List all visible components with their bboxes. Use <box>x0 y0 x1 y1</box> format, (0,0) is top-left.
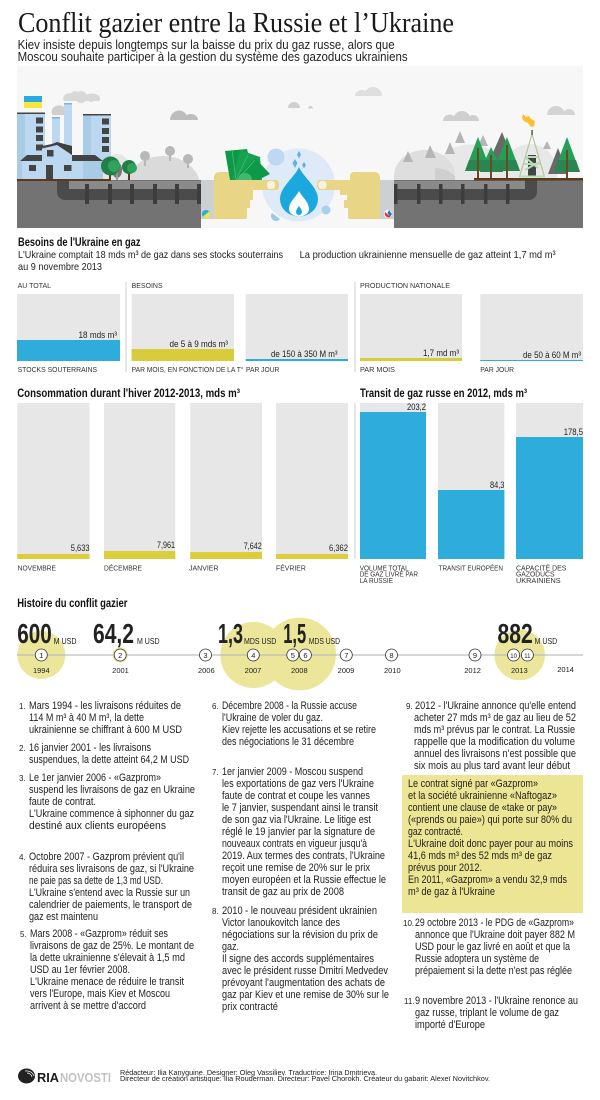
callout: take or pay: En 2011, «Gazprom» a vendu 32,9 mds <box>408 874 567 886</box>
panel: au total: 18 mds m³ <box>78 330 117 340</box>
bar: transit européen: TRANSIT EUROPÉEN <box>439 564 503 572</box>
event 8: prix contracté <box>222 1001 278 1013</box>
central valves <box>201 180 394 219</box>
event 8: Il signe des accords supplémentaires <box>222 953 375 965</box>
event numbers: 10 <box>510 654 518 660</box>
bar: février: 6,362 <box>329 543 348 553</box>
bar: volume total: VOLUME TOTAL <box>360 564 409 572</box>
event 5: Mars 2008 - «Gazprom» réduit ses <box>30 928 168 940</box>
intro paragraph: production: La production ukrainienne mensuelle de gaz atteint 1,7 md m³ <box>300 249 556 261</box>
callout: take or pay: contient une clause de «take or pay» <box>408 802 557 814</box>
bar: février: FÉVRIER <box>276 564 306 572</box>
event 9: annuel des livraisons n'est possible que <box>414 748 576 760</box>
debt amounts <box>17 618 533 649</box>
bar: novembre: 5,633 <box>71 543 90 553</box>
event 7: nouveaux contrats en vigueur jusqu'à <box>222 838 367 850</box>
years: 2006 <box>198 666 215 675</box>
subtitle: Moscou souhaite participer à la gestion du système des gazoducs ukrainiens <box>18 49 408 64</box>
bar: volume total: LA RUSSIE <box>360 576 393 585</box>
divider lines <box>126 282 356 559</box>
event 4: 4. <box>19 853 26 862</box>
event numbers: 3 <box>203 651 208 660</box>
bar: novembre: NOVEMBRE <box>18 564 56 572</box>
panel: au total: AU TOTAL <box>18 281 51 290</box>
event 2: suspendues, la dette atteint 64,2 M USD <box>29 754 189 766</box>
credits: Rédacteur: Ilia Kanyguine. Designer: Oleg Vassiliev. Traductrice: Irina Dmitrieva. <box>120 1070 377 1077</box>
event 3: 3. <box>19 774 26 783</box>
panel: production par mois <box>360 281 462 374</box>
event 8: négociations sur la révision du prix de <box>222 929 378 941</box>
event 7: transit de gaz au prix de 2008 <box>222 886 344 898</box>
event 7 <box>212 766 386 898</box>
bar: capacité <box>516 403 583 585</box>
debt circles <box>17 618 545 690</box>
event 7: moyen européen et la Russie effectue le <box>222 874 386 886</box>
panel: production par jour: de 50 à 60 M m³ <box>523 350 581 360</box>
event 8: gaz. <box>222 941 239 953</box>
years: 2010 <box>384 666 401 675</box>
event 4: gaz est maintenu <box>29 911 98 923</box>
event 7: les exportations de gaz vers l'Ukraine <box>222 778 374 790</box>
event 5: 5. <box>20 930 27 939</box>
event 8 <box>212 905 389 1013</box>
event 7: réglé le 19 janvier par la signature de <box>222 826 375 838</box>
event 1: ukrainienne se chiffrant à 600 M USD <box>29 724 182 736</box>
bar: capacité: 178,5 <box>564 427 583 437</box>
left hills <box>100 154 134 206</box>
intro paragraph: stocks: au 9 novembre 2013 <box>18 261 102 273</box>
debt units: M USD <box>535 637 557 646</box>
icon: Ukraine badge <box>202 210 210 218</box>
event 8: gaz par Kiev et une remise de 30% sur le <box>222 989 389 1001</box>
event 4: calendrier de paiements, le transport de <box>29 899 192 911</box>
bar: volume total <box>360 402 426 585</box>
event 7: 7. <box>212 768 219 777</box>
panel: production par jour: PAR JOUR <box>480 365 515 374</box>
green trees <box>101 156 137 180</box>
event numbers <box>39 651 531 660</box>
bar: novembre <box>17 403 90 572</box>
debt amounts: 1,3 <box>218 618 243 649</box>
bar: janvier: 7,642 <box>244 541 262 551</box>
right hills <box>435 144 505 180</box>
clouds <box>63 87 575 121</box>
left gray trees <box>140 146 193 168</box>
event 5: la dette ukrainienne s'élevait à 1,5 md <box>30 952 185 964</box>
event 9: 9. <box>406 702 413 711</box>
debt amounts: 882 <box>498 618 533 649</box>
intro paragraph: stocks: L'Ukraine comptait 18 mds m³ de gaz dans ses stocks souterrains <box>18 249 283 261</box>
subtitle <box>18 37 408 64</box>
event 6: 6. <box>212 702 219 711</box>
event numbers: 1 <box>39 651 43 660</box>
event 8: 8. <box>212 907 219 916</box>
bar: capacité: CAPACITÉ DES <box>516 564 566 572</box>
event 9: 2012 - l'Ukraine annonce qu'elle entend <box>415 700 576 712</box>
bar: capacité: UKRAINIENS <box>516 576 561 585</box>
heading: needs: Besoins de l'Ukraine en gaz <box>18 235 140 249</box>
event numbers: 4 <box>251 651 255 660</box>
event 4: L'Ukraine s'entend avec la Russie sur un <box>29 887 190 899</box>
years <box>33 665 574 675</box>
event 2: 16 janvier 2001 - les livraisons <box>29 742 152 754</box>
panel: besoins par jour: PAR JOUR <box>246 365 280 374</box>
subtitle: Kiev insiste depuis longtemps sur la baisse du prix du gaz russe, alors que <box>18 37 395 52</box>
right gray trees <box>403 131 551 162</box>
callout: take or pay: Le contrat signé par «Gazprom» <box>408 778 538 790</box>
event 5: L'Ukraine menace de réduire le transit <box>30 976 184 988</box>
event 5: vers l'Europe, mais Kiev et Moscou <box>30 988 170 1000</box>
years: 2008 <box>291 666 308 675</box>
event 6: l'Ukraine de voler du gaz. <box>222 712 323 724</box>
years: 2012 <box>464 666 481 675</box>
event 4: Octobre 2007 - Gazprom prévient qu'il <box>29 851 184 863</box>
illustration: gas conflict scene <box>17 66 583 228</box>
bar: volume total: DE GAZ LIVRÉ PAR <box>360 570 418 579</box>
bar: volume total: 203,2 <box>407 402 426 412</box>
event 7: reçoit une remise de 20% sur le prix <box>222 862 371 874</box>
event 8: avec le président russe Dmitri Medvedev <box>222 965 389 977</box>
bar: décembre: DÉCEMBRE <box>104 564 142 572</box>
credits <box>120 1070 490 1083</box>
event 3 <box>19 772 195 832</box>
event 7: 1er janvier 2009 - Moscou suspend <box>222 766 363 778</box>
bar chart: gas transit <box>360 402 583 585</box>
event 10: 10. <box>403 919 414 928</box>
panel: production par jour <box>480 294 583 374</box>
event 5: livraisons de gaz de 25%. Le montant de <box>30 940 194 952</box>
event 11: gaz russe, triplant le volume de gaz <box>415 1007 559 1019</box>
panel: besoins par mois: de 5 à 9 mds m³ <box>170 339 228 349</box>
event 5: arrivent à se mettre d'accord <box>30 1000 146 1012</box>
heading: transit: Transit de gaz russe en 2012, mds m³ <box>360 386 527 400</box>
event 6: des négociations le 31 décembre <box>222 736 354 748</box>
debt amounts: 1,5 <box>283 618 306 649</box>
event 6 <box>212 700 376 748</box>
debt amounts: 600 <box>17 618 52 649</box>
event 11: 11. <box>404 997 415 1006</box>
event 5 <box>20 928 194 1012</box>
event 11 <box>404 995 578 1031</box>
event 3: destiné aux clients européens <box>29 820 167 832</box>
green pine trees <box>465 137 580 178</box>
years: 2013 <box>511 666 528 675</box>
event 9: mds m³ prévus par le contrat. La Russie <box>414 724 575 736</box>
logo: RIA Novosti: RIA <box>37 1070 60 1085</box>
event 10: annonce que l'Ukraine doit payer 882 M <box>415 929 575 941</box>
icon: Russia badge <box>384 210 392 218</box>
event 6: Kiev rejette les accusations et se retire <box>222 724 376 736</box>
event 7: faute de contrat et coupe les vannes <box>222 790 371 802</box>
panel: au total <box>17 281 120 374</box>
panel: production par mois: 1,7 md m³ <box>423 348 459 358</box>
event 10: USD pour le gaz livré en août et que la <box>415 941 570 953</box>
event 5: USD au 1er février 2008. <box>30 964 130 976</box>
event 7: le 7 janvier, suspendant ainsi le transit <box>222 802 378 814</box>
event 11: importé d'Europe <box>415 1019 485 1031</box>
event 3: faute de contrat. <box>29 796 96 808</box>
event 4: réduira ses livraisons de gaz, si l'Ukraine <box>29 863 194 875</box>
logo: RIA Novosti: NOVOSTI <box>60 1070 111 1085</box>
callout: take or pay: et la société ukrainienne «Naftogaz» <box>408 790 557 802</box>
heading: consumption: Consommation durant l'hiver 2012-2013, mds m³ <box>17 386 240 400</box>
event 10 <box>403 917 575 977</box>
event 4 <box>19 851 194 923</box>
heading: history: Histoire du conflit gazier <box>17 596 128 610</box>
bar: février <box>276 403 348 572</box>
event 7: de son gaz via l'Ukraine. Le litige est <box>222 814 371 826</box>
panel: besoins par mois <box>132 281 244 374</box>
event 7: 2019. Aux termes des contrats, l'Ukraine <box>222 850 385 862</box>
event 9: acheter 27 mds m³ de gaz au lieu de 52 <box>414 712 576 724</box>
event 3: Le 1er janvier 2006 - «Gazprom» <box>29 772 161 784</box>
event numbers: 6 <box>303 651 307 660</box>
event 3: L'Ukraine commence à siphonner du gaz <box>29 808 194 820</box>
years: 2009 <box>338 666 354 675</box>
callout: take or pay: («prends ou paie») qui porte sur 80% du <box>408 814 572 826</box>
event numbers: 8 <box>389 651 394 660</box>
event 2 <box>19 742 189 766</box>
debt units <box>54 637 557 646</box>
panel: au total: STOCKS SOUTERRAINS <box>18 365 97 374</box>
callout: take or pay: gaz contracté. <box>408 826 463 838</box>
event 10: prépaiement si la dette n'est pas réglée <box>415 965 572 977</box>
panel: besoins par jour: de 150 à 350 M m³ <box>271 349 338 359</box>
left hand <box>214 172 279 219</box>
title: Conflit gazier entre la Russie et l’Ukraine <box>18 7 454 39</box>
left ground and pipe <box>17 179 201 228</box>
event numbers: 2 <box>118 651 122 660</box>
bar: capacité: GAZODUCS <box>516 570 554 579</box>
callout: take or pay: L'Ukraine doit donc payer pour au moins <box>408 838 574 850</box>
event numbers: 9 <box>473 651 477 660</box>
event numbers: 11 <box>524 654 531 660</box>
panel: besoins par jour <box>246 294 348 374</box>
years: 2014 <box>557 665 574 674</box>
event 9: six mois au plus tard avant leur début <box>414 760 570 772</box>
bar: décembre <box>104 403 175 572</box>
gas bubble and drop <box>262 148 335 222</box>
callout: take or pay: prévus pour 2012. <box>408 862 482 874</box>
debt units: MDS USD <box>309 637 340 646</box>
right ground and pipe <box>394 178 583 228</box>
bar: transit européen: 84,3 <box>490 480 504 490</box>
debt units: MDS USD <box>244 637 276 646</box>
event 8: prévoyant l'augmentation des achats de <box>222 977 385 989</box>
callout: take or pay: m³ de gaz à l'Ukraine <box>408 886 495 898</box>
event 1: Mars 1994 - les livraisons réduites de <box>29 700 181 712</box>
credits: Directeur de création artistique: Ilia Rouderman. Directeur: Pavel Chorokh. Créateur du gabarit: Alexeï Novitchkov. <box>120 1076 490 1083</box>
gas rig with flame <box>520 114 545 177</box>
years: 2001 <box>112 666 129 675</box>
event 2: 2. <box>19 744 26 753</box>
event 8: Victor Ianoukovitch lance des <box>222 917 341 929</box>
factory and city buildings <box>17 103 111 180</box>
callout: take or pay <box>402 775 583 913</box>
icon: Ukrainian flag <box>24 96 42 108</box>
event numbers: 7 <box>344 651 348 660</box>
panel: production par mois: PAR MOIS <box>360 365 395 374</box>
dark gray trees <box>488 132 568 174</box>
logo: RIA Novosti <box>18 1068 111 1085</box>
debt amounts: 64,2 <box>93 618 134 649</box>
years: 2007 <box>245 666 261 675</box>
years: 1994 <box>33 666 50 675</box>
bar: janvier <box>189 403 262 572</box>
event 1: 114 M m³ à 40 M m³, la dette <box>29 712 144 724</box>
event 1 <box>19 700 182 736</box>
event markers <box>35 649 533 661</box>
right hand <box>317 172 380 219</box>
event 10: Russie adoptera un système de <box>415 953 539 965</box>
event 9 <box>406 700 576 772</box>
event 8: 2010 - le nouveau président ukrainien <box>222 905 377 917</box>
event 4: ne paie pas sa dette de 1,3 md USD. <box>29 875 163 887</box>
icon: banknotes <box>225 149 270 180</box>
bar chart: winter consumption <box>17 403 348 572</box>
event 9: rappelle que la modification du volume <box>414 736 575 748</box>
debt units: M USD <box>137 637 160 646</box>
bar: décembre: 7,961 <box>157 540 175 550</box>
event 3: suspend les livraisons de gaz en Ukraine <box>29 784 195 796</box>
panel: besoins par mois: BESOINS <box>132 281 163 290</box>
callout: take or pay: 41,6 mds m³ des 52 mds m³ de gaz <box>408 850 552 862</box>
panel: besoins par mois: PAR MOIS, EN FONCTION DE LA T° <box>132 365 244 374</box>
debt units: M USD <box>54 637 77 646</box>
bar: janvier: JANVIER <box>189 564 219 572</box>
bar: transit européen <box>438 403 504 572</box>
event numbers: 5 <box>291 651 295 660</box>
intro paragraph: stocks <box>18 249 283 273</box>
timeline <box>17 618 583 690</box>
event 6: Décembre 2008 - la Russie accuse <box>222 700 357 712</box>
panel: production par mois: PRODUCTION NATIONALE <box>360 281 450 290</box>
event 1: 1. <box>19 702 26 711</box>
